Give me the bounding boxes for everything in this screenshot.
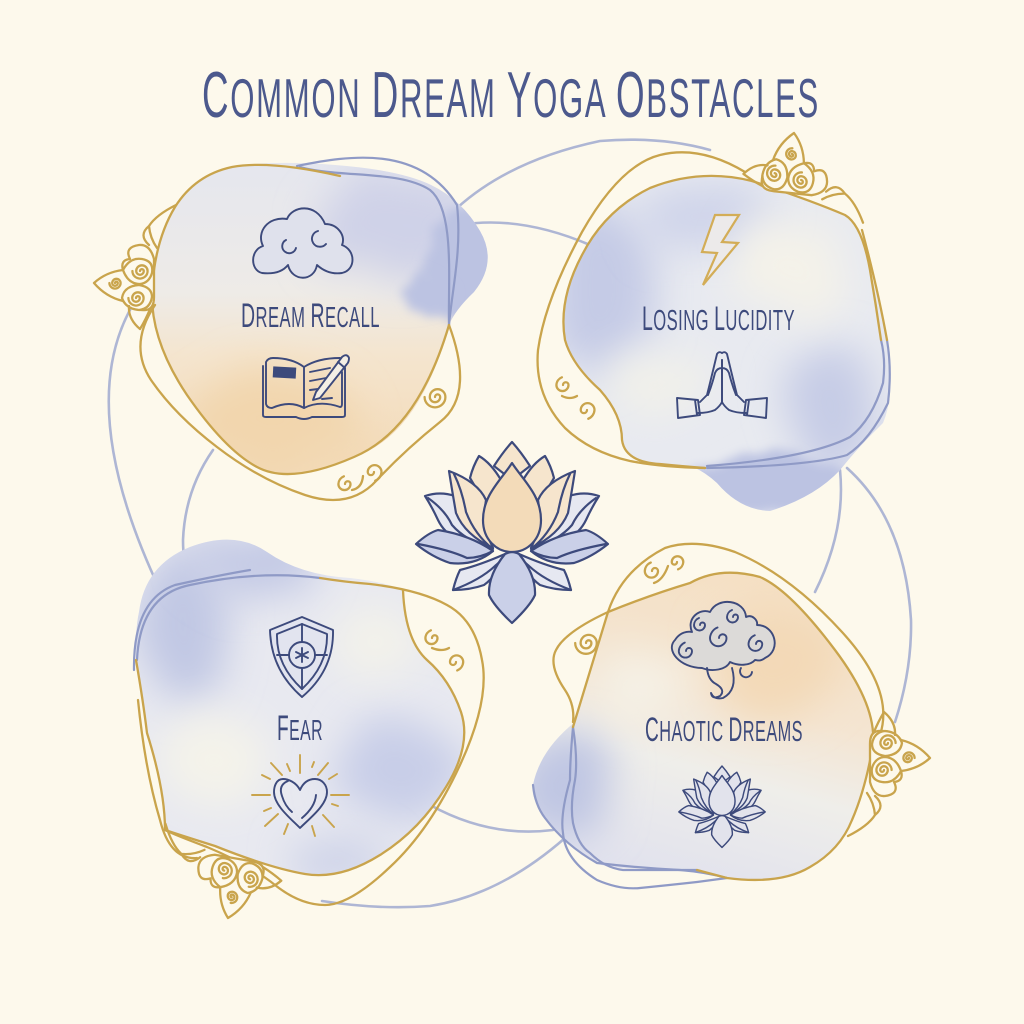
panel: fear (125, 525, 485, 926)
swirl: lower left (556, 377, 594, 419)
ornament: bottom corner (151, 824, 288, 926)
gold and blue outlines (140, 158, 460, 500)
watercolor blob: fear (136, 540, 463, 874)
icon: small lotus (679, 766, 765, 847)
label: losing lucidity: LOSING LUCIDITY (642, 300, 795, 338)
swirl: top (645, 556, 683, 583)
icon: open book and pen (263, 355, 349, 419)
label: fear: FEAR (277, 709, 323, 748)
icon: praying hands (677, 352, 767, 418)
icon: cloud (253, 208, 352, 278)
ornament: left corner (94, 205, 176, 329)
ornament: right corner (848, 712, 930, 836)
label: dream recall: DREAM RECALL (241, 297, 380, 335)
swirl: left (575, 635, 597, 654)
icon: central lotus (416, 442, 608, 623)
gold and blue outlines (538, 152, 890, 468)
watercolor blob: losing lucidity (564, 177, 889, 511)
watercolor blob: dream recall (154, 163, 488, 473)
swirl: upper right (425, 630, 463, 670)
label: chaotic dreams: CHAOTIC DREAMS (645, 711, 803, 749)
icon: shield (270, 617, 333, 697)
panel: losing lucidity (538, 128, 900, 530)
gold and blue outlines (533, 544, 883, 888)
background rings (109, 140, 911, 907)
panel: chaotic dreams (520, 544, 930, 890)
swirl: right (425, 389, 445, 407)
swirl: bottom (338, 465, 382, 490)
title: COMMON DREAM YOGA OBSTACLES (202, 58, 820, 131)
panel: dream recall (94, 150, 515, 500)
icon: swirling cloud (672, 602, 775, 698)
icon: heart with rays (252, 755, 349, 836)
watercolor blob: chaotic dreams (532, 574, 872, 879)
gold and blue outlines (134, 570, 484, 905)
ornament: top corner (740, 128, 872, 223)
icon: lightning bolt (702, 215, 739, 285)
